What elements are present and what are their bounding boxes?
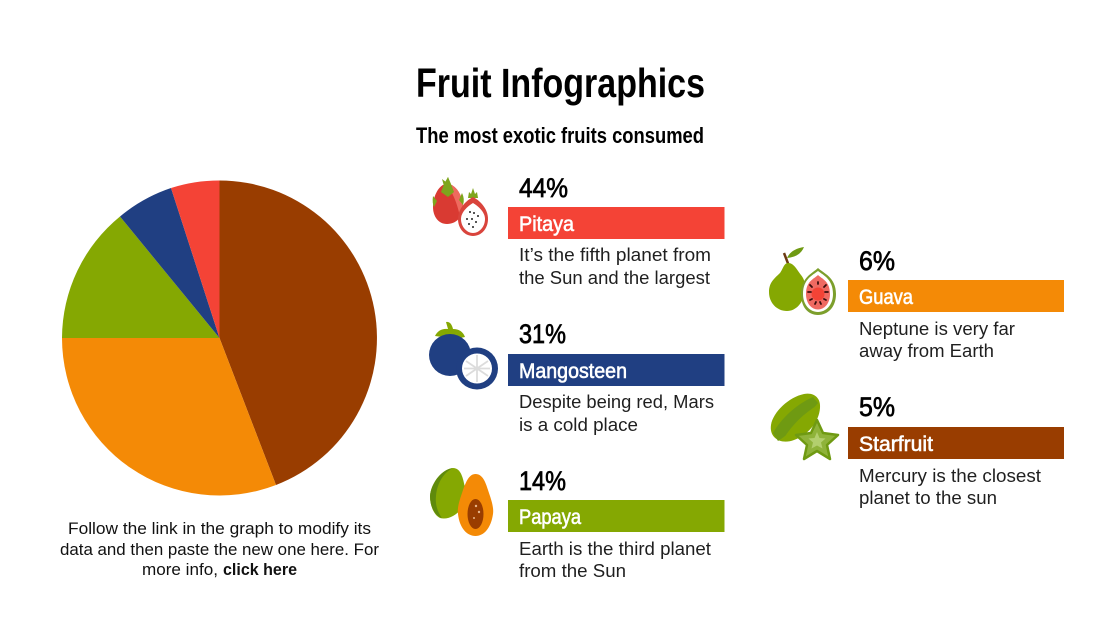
label bar: Pitaya — [519, 212, 574, 236]
description — [859, 466, 1041, 508]
description: away from Earth — [859, 341, 994, 361]
label bar — [848, 427, 1064, 459]
percentage: 44% — [519, 173, 568, 203]
panel: Papaya — [430, 466, 724, 581]
label bar: Mangosteen — [519, 359, 627, 383]
label bar: Starfruit — [859, 432, 933, 456]
description — [519, 392, 714, 435]
subtitle: The most exotic fruits consumed — [416, 123, 704, 148]
pie chart — [62, 180, 377, 495]
caption — [60, 520, 380, 579]
description: from the Sun — [519, 561, 626, 581]
panel: Starfruit — [771, 392, 1064, 508]
panel: Mangosteen — [429, 319, 724, 435]
description — [519, 245, 711, 288]
label bar: Papaya — [519, 505, 581, 529]
icon: starfruit — [771, 394, 838, 459]
label bar: Guava — [859, 285, 913, 309]
description: the Sun and the largest — [519, 268, 710, 288]
panel: Pitaya — [433, 173, 724, 288]
caption: click here — [223, 561, 297, 579]
icon: pitaya — [433, 177, 488, 236]
caption: more info, — [142, 561, 218, 579]
label bar — [508, 354, 724, 386]
description — [519, 539, 711, 581]
caption: data and then paste the new one here. For — [60, 541, 380, 559]
description: Earth is the third planet — [519, 539, 711, 559]
description: planet to the sun — [859, 488, 997, 508]
percentage: 6% — [859, 246, 895, 276]
percentage: 14% — [519, 466, 566, 496]
percentage: 5% — [859, 392, 895, 422]
label bar — [848, 280, 1064, 312]
description: It’s the fifth planet from — [519, 245, 711, 265]
caption: Follow the link in the graph to modify its — [68, 520, 371, 538]
description — [859, 319, 1015, 361]
description: is a cold place — [519, 415, 638, 435]
title: Fruit Infographics — [416, 60, 705, 106]
description: Neptune is very far — [859, 319, 1015, 339]
icon: guava — [769, 247, 836, 315]
icon: papaya — [430, 468, 493, 536]
label bar — [508, 207, 724, 239]
description: Mercury is the closest — [859, 466, 1041, 486]
percentage: 31% — [519, 319, 566, 349]
label bar — [508, 500, 724, 532]
icon: mangosteen — [429, 322, 498, 390]
description: Despite being red, Mars — [519, 392, 714, 412]
panel: Guava — [769, 246, 1064, 361]
